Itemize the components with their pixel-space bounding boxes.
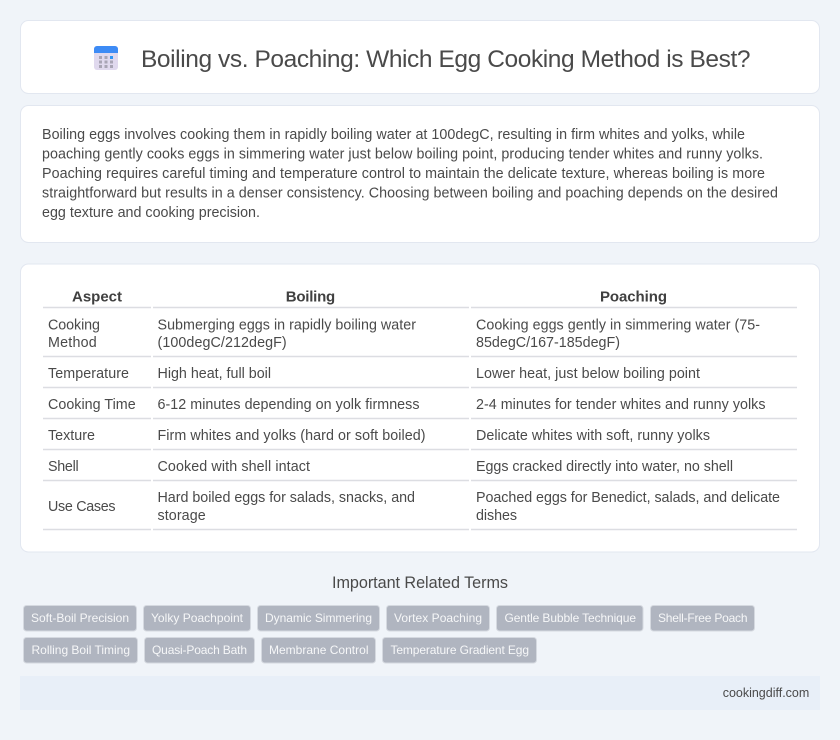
text block: summary paragraph: poaching gently cooks eggs in simmering water just below boiling point, producing tender whites and runny yolks.: [42, 147, 763, 163]
table row: cooking method: [43, 318, 797, 356]
table row: cooking time: 2-4 minutes for tender whites and runny yolks: [476, 397, 766, 413]
tag: Dynamic Simmering: [258, 606, 380, 631]
text block: summary paragraph: egg texture and cooking precision.: [42, 205, 260, 221]
text block: summary paragraph: Boiling eggs involves cooking them in rapidly boiling water at 100degC, resulting in firm whites and yolks, while: [42, 127, 745, 143]
table row: temperature: Lower heat, just below boiling point: [476, 366, 700, 382]
panel: header: [20, 20, 820, 94]
text block: summary paragraph: Poaching requires careful timing and temperature control to maintain the delicate texture, whereas boiling is more: [42, 166, 765, 182]
footer: [20, 676, 820, 710]
table row: temperature: Temperature: [48, 366, 129, 382]
table row: cooking time: [43, 397, 797, 418]
table row: shell: Shell: [48, 459, 79, 475]
table row: use cases: Hard boiled eggs for salads, snacks, and: [158, 490, 415, 506]
table row: use cases: [43, 490, 797, 530]
table row: cooking time: Cooking Time: [48, 397, 136, 413]
table header row: Aspect: [72, 289, 122, 306]
table header row: Boiling: [286, 289, 335, 306]
table row: cooking method: Cooking: [48, 318, 100, 334]
table row: cooking time: 6-12 minutes depending on yolk firmness: [158, 397, 420, 413]
tag: Soft-Boil Precision: [24, 606, 136, 631]
table row: cooking method: Method: [48, 335, 97, 351]
tag: Shell-Free Poach: Shell-Free Poach: [658, 611, 748, 625]
title: Boiling vs. Poaching: Which Egg Cooking Method is Best?: [141, 46, 750, 73]
table row: use cases: Poached eggs for Benedict, salads, and delicate: [476, 490, 780, 506]
tag: Shell-Free Poach: [650, 606, 754, 631]
table row: texture: [43, 428, 797, 450]
table row: temperature: High heat, full boil: [158, 366, 271, 382]
table row: cooking method: (100degC/212degF): [158, 335, 287, 351]
tag: Membrane Control: [262, 638, 376, 663]
table header row: [43, 289, 797, 308]
tag: Yolky Poachpoint: Yolky Poachpoint: [151, 611, 244, 625]
table row: shell: Cooked with shell intact: [158, 459, 310, 475]
tag: Gentle Bubble Technique: Gentle Bubble Technique: [504, 611, 636, 625]
tag: Quasi-Poach Bath: [144, 638, 254, 663]
table row: cooking method: Submerging eggs in rapidly boiling water: [158, 318, 416, 334]
table row: texture: Firm whites and yolks (hard or soft boiled): [158, 428, 426, 444]
tag: Quasi-Poach Bath: Quasi-Poach Bath: [152, 643, 247, 657]
tag: Rolling Boil Timing: Rolling Boil Timing: [32, 643, 130, 657]
tag: Soft-Boil Precision: Soft-Boil Precision: [31, 611, 129, 625]
tag: Dynamic Simmering: Dynamic Simmering: [265, 611, 372, 625]
text block: summary paragraph: [42, 127, 778, 221]
text block: summary paragraph: straightforward but results in a denser consistency. Choosing between boiling and poaching depends on the desired: [42, 186, 778, 202]
icon: calendar: [94, 46, 118, 70]
tag: Gentle Bubble Technique: [496, 606, 643, 631]
heading: important related terms: Important Related Terms: [332, 574, 508, 592]
tag: Membrane Control: Membrane Control: [269, 643, 368, 657]
table row: texture: Texture: [48, 428, 95, 444]
tag: Temperature Gradient Egg: Temperature Gradient Egg: [390, 643, 529, 657]
table row: cooking method: Cooking eggs gently in simmering water (75-: [476, 318, 760, 334]
table row: temperature: [43, 366, 797, 388]
table row: cooking method: 85degC/167-185degF): [476, 335, 620, 351]
footer source text: cookingdiff.com: [723, 686, 809, 700]
tag: Temperature Gradient Egg: [382, 638, 536, 663]
tag: Yolky Poachpoint: [144, 606, 250, 631]
tag group: related terms: [24, 606, 754, 663]
tag: Vortex Poaching: [386, 606, 490, 631]
table header row: Poaching: [600, 289, 667, 306]
table row: use cases: Use Cases: [48, 499, 116, 515]
tag: Rolling Boil Timing: [24, 638, 138, 663]
table row: texture: Delicate whites with soft, runny yolks: [476, 428, 710, 444]
tag: Vortex Poaching: Vortex Poaching: [394, 611, 482, 625]
panel: comparison table: [20, 264, 820, 552]
table row: shell: Eggs cracked directly into water, no shell: [476, 459, 733, 475]
table row: use cases: storage: [158, 508, 206, 524]
panel: summary: [20, 106, 820, 242]
table row: use cases: dishes: [476, 508, 517, 524]
table row: shell: [43, 459, 797, 480]
